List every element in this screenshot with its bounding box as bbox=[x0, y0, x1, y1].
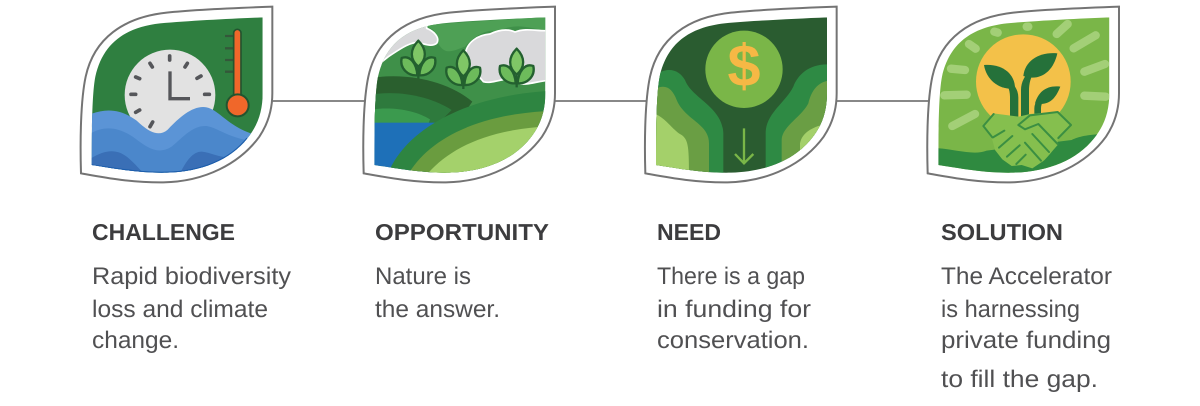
text block: need: conservation. bbox=[657, 327, 809, 354]
foreground hills bbox=[390, 91, 546, 173]
heading: challenge: CHALLENGE bbox=[92, 219, 235, 245]
text block: solution: private funding bbox=[941, 327, 1111, 354]
connector line: opportunity to need bbox=[552, 100, 648, 102]
text block: need: There is a gap bbox=[657, 263, 805, 290]
text block: opportunity: Nature is bbox=[375, 263, 471, 290]
heading: opportunity: OPPORTUNITY bbox=[375, 219, 549, 245]
coin: $ bbox=[727, 32, 760, 99]
text block: opportunity: the answer. bbox=[375, 296, 500, 323]
down arrow bbox=[735, 128, 753, 163]
sun bbox=[976, 34, 1071, 117]
clouds bbox=[382, 26, 546, 85]
column: solution bbox=[941, 219, 1112, 393]
column: challenge bbox=[92, 219, 291, 354]
column: need bbox=[657, 219, 811, 354]
icon: challenge leaf with clock, thermometer and waves bbox=[81, 7, 272, 187]
text block: need: in funding for bbox=[657, 296, 811, 323]
clock bbox=[125, 50, 215, 140]
waves bbox=[92, 107, 251, 173]
text block: opportunity bbox=[375, 263, 500, 323]
text block: challenge: change. bbox=[92, 327, 179, 354]
sprout bbox=[984, 53, 1060, 117]
text block: solution: The Accelerator bbox=[941, 263, 1112, 290]
text block: solution: to fill the gap. bbox=[941, 366, 1098, 393]
column: opportunity bbox=[375, 219, 549, 323]
icon: need leaf with dollar coin and funnel bbox=[645, 7, 837, 183]
text block: challenge: Rapid biodiversity bbox=[92, 263, 291, 290]
icon: opportunity leaf with clouds, plants, hills and water bbox=[363, 7, 555, 187]
connector line: challenge to opportunity bbox=[270, 100, 365, 102]
icon: solution leaf with sun, sprout and handshake bbox=[927, 7, 1122, 187]
connector line: need to solution bbox=[835, 100, 932, 102]
text block: challenge bbox=[92, 263, 291, 354]
text block: solution: is harnessing bbox=[941, 296, 1080, 323]
text block: challenge: loss and climate bbox=[92, 296, 268, 323]
left funnel bands bbox=[656, 70, 724, 173]
thermometer bbox=[225, 29, 249, 116]
text block: need bbox=[657, 263, 811, 354]
coin bbox=[705, 31, 783, 108]
heading: need: NEED bbox=[657, 219, 721, 245]
handshake bbox=[983, 112, 1071, 168]
heading: solution: SOLUTION bbox=[941, 219, 1063, 245]
back hills bbox=[374, 76, 472, 172]
sun rays bbox=[944, 24, 1106, 126]
ground bbox=[938, 134, 1098, 173]
right funnel bands bbox=[766, 64, 827, 168]
plants bbox=[401, 41, 534, 89]
text block: solution bbox=[941, 263, 1112, 393]
